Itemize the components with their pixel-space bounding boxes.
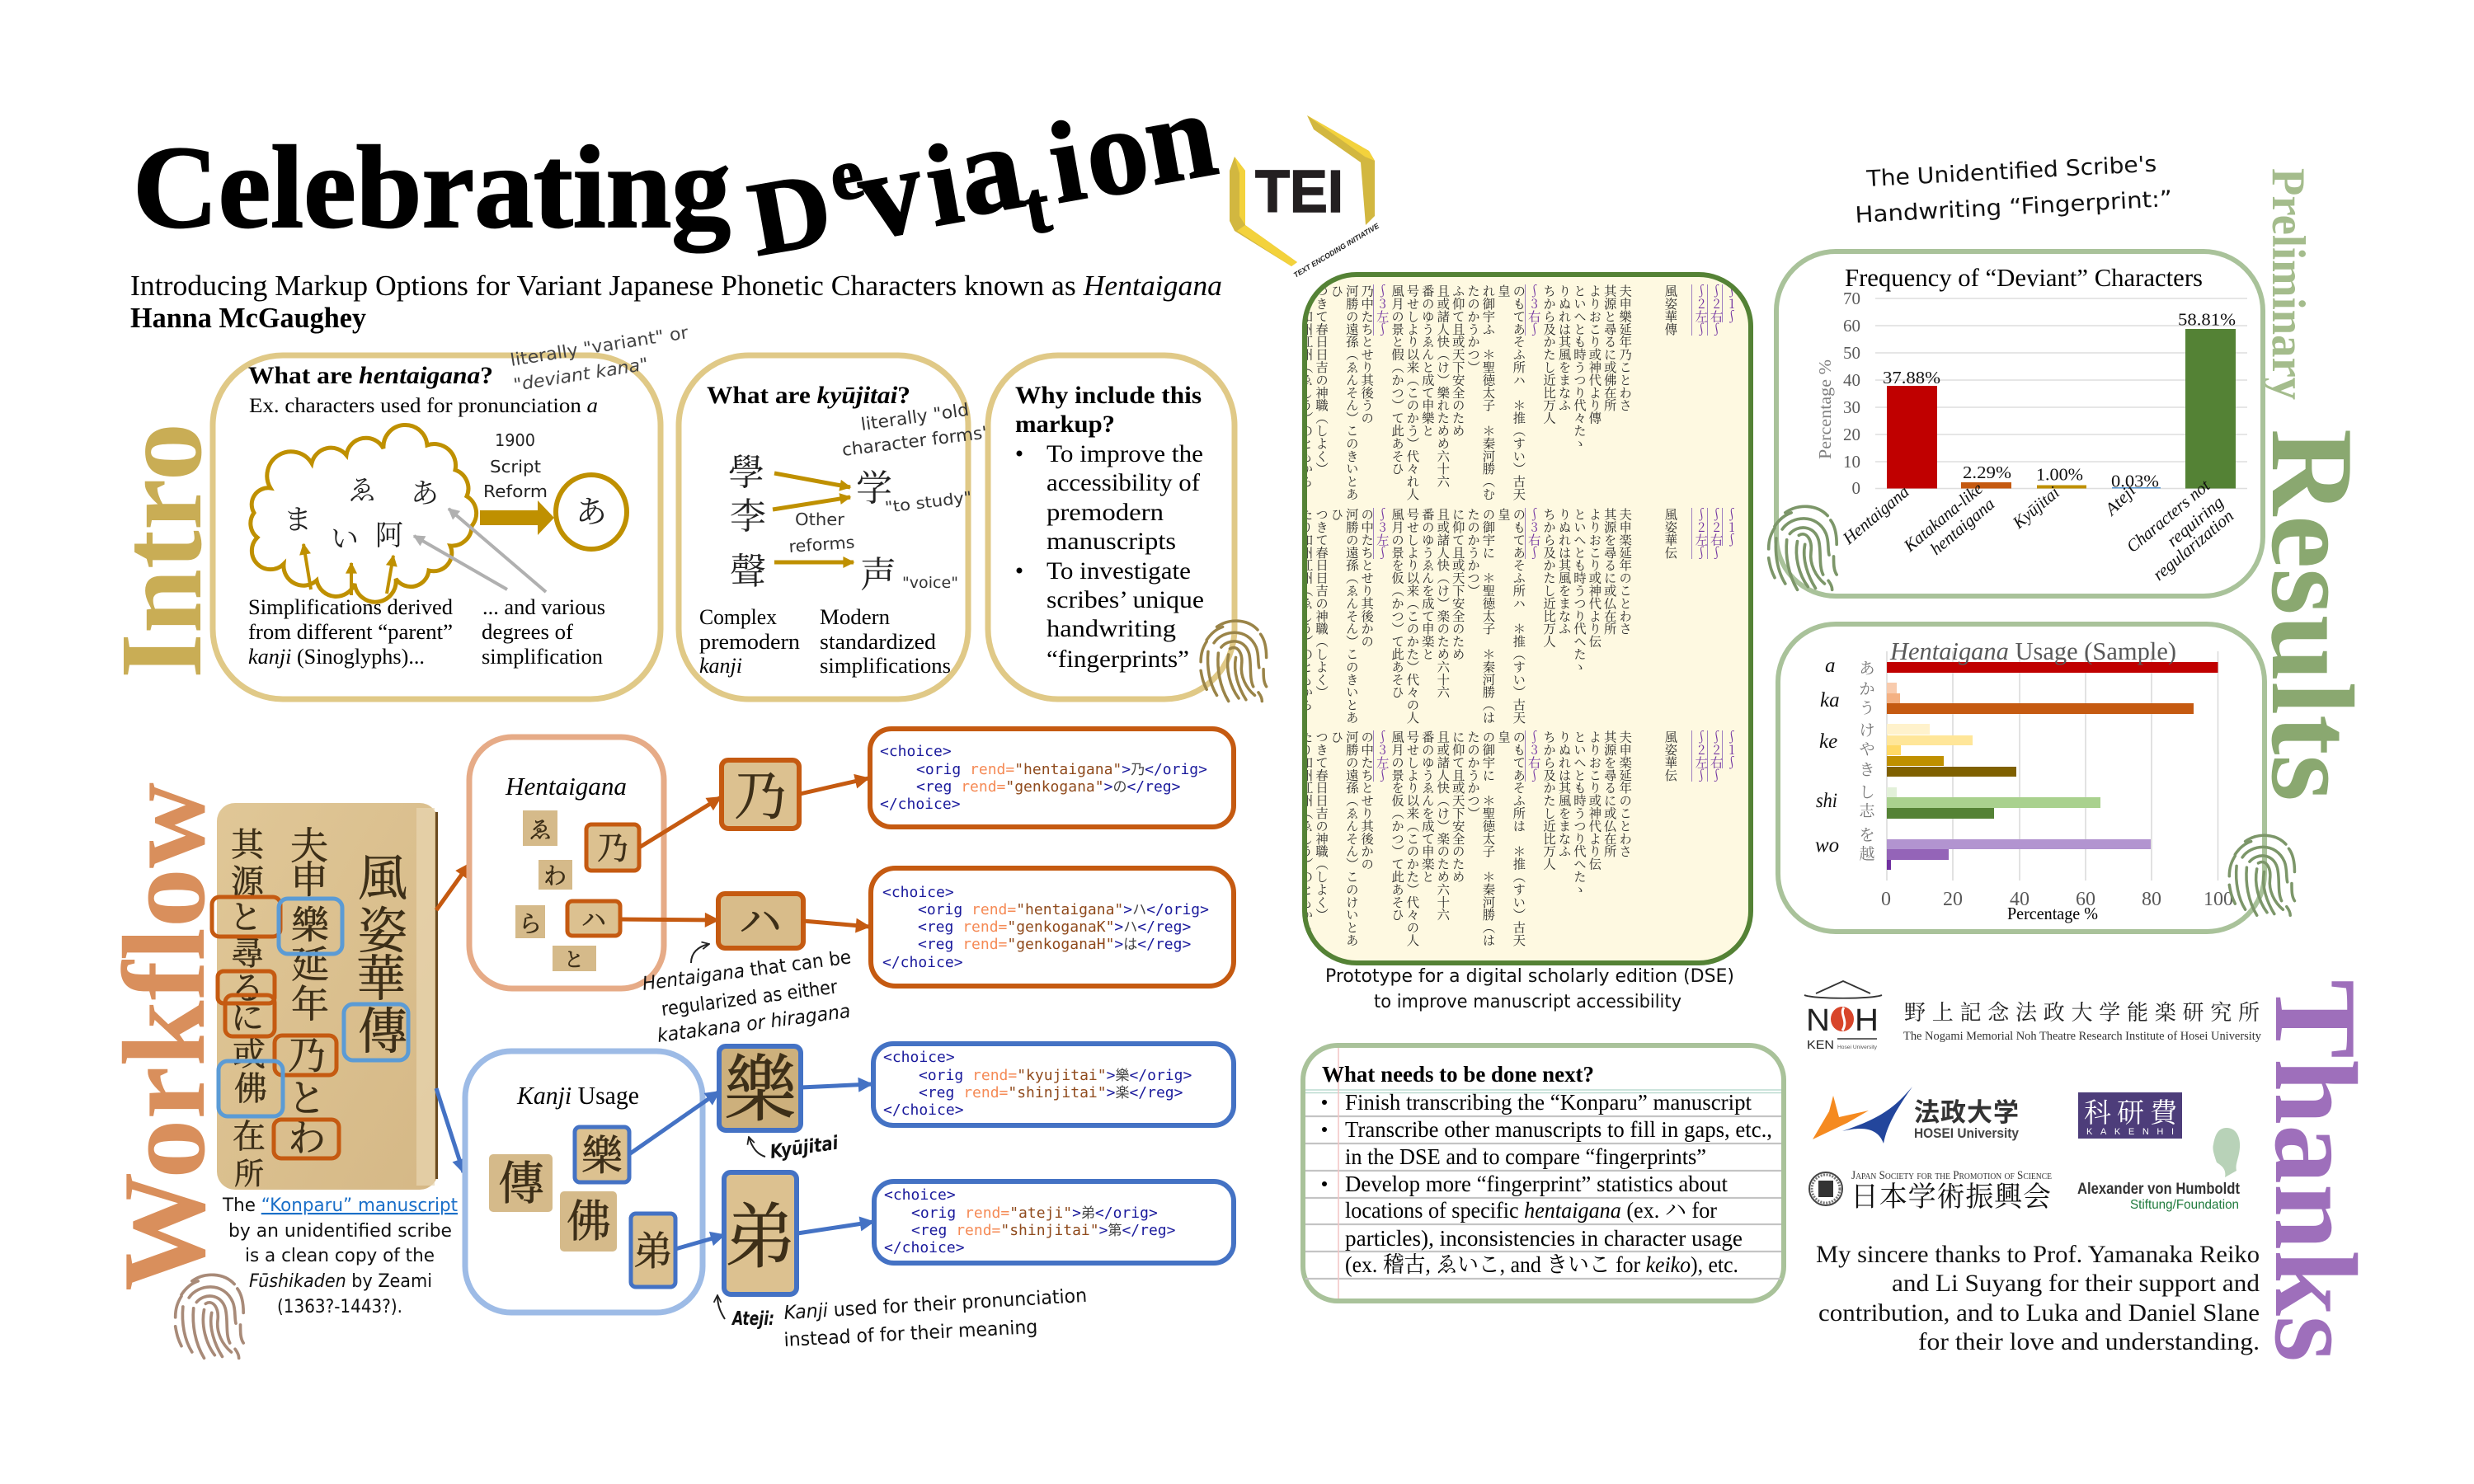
thumbnails: 弟 xyxy=(633,1219,673,1276)
handwritten note: literally "old xyxy=(859,400,970,434)
handwritten heading: fingerprint xyxy=(1855,152,2173,228)
captions: premodern xyxy=(699,630,800,654)
section label: Preliminary: Preliminary xyxy=(2262,168,2314,400)
bar chart: き xyxy=(1859,758,1875,780)
note: ateji: Kanji used for their pronunciation xyxy=(783,1285,1088,1324)
list: in the DSE and to compare “fingerprints” xyxy=(1345,1144,1706,1169)
logo: Nohken: H xyxy=(1855,1003,1879,1038)
handwritten note: character forms" xyxy=(841,422,991,460)
caption left: from different “parent” xyxy=(248,620,453,644)
manuscript image: わ xyxy=(288,1108,326,1162)
bar chart: requiring xyxy=(2163,492,2227,551)
acknowledgements text: My sincere thanks to Prof. Yamanaka Reiko xyxy=(1816,1241,2260,1268)
panel: what are hentaigana xyxy=(213,322,689,699)
manuscript image: 源 xyxy=(231,856,265,903)
code box: kyujitai: <choice> xyxy=(883,1049,955,1066)
caption right: simplification xyxy=(482,645,603,669)
caption right xyxy=(482,595,605,669)
list: locations of specific hentaigana (ex. ハ for xyxy=(1345,1192,1717,1224)
code box: hentaigana ha: <reg rend="genkoganaK">ハ</reg> xyxy=(918,915,1191,936)
DSE caption: Prototype for a digital scholarly edition (DSE) xyxy=(1325,966,1734,987)
sub text: Ex. characters used for pronunciation a xyxy=(249,395,598,417)
bar chart: Kyūjitai xyxy=(2008,482,2063,533)
thumbnails: と xyxy=(564,943,584,972)
bar chart: 80 xyxy=(2142,889,2161,910)
bar chart: 20 xyxy=(1943,889,1963,910)
bar chart: あ xyxy=(1859,656,1875,679)
title: Celebrating xyxy=(133,122,731,253)
manuscript image: 申 xyxy=(290,850,328,904)
bar chart: Hentaigana xyxy=(1838,481,1913,548)
acknowledgements text: and Li Suyang for their support and xyxy=(1892,1270,2260,1297)
manuscript image: 在 xyxy=(233,1111,266,1158)
heading: Kanji Usage xyxy=(516,1081,639,1110)
manuscript image: 延 xyxy=(291,935,329,989)
chart title: Frequency of “Deviant” Characters xyxy=(1845,263,2203,292)
icon: cloud of variant characters: ま xyxy=(284,497,312,538)
heading xyxy=(1015,382,1202,438)
bar chart: regularization xyxy=(2149,505,2237,585)
title word: Deviation: a xyxy=(948,97,1032,242)
list: (ex. 稽古, ゑいこ, and きいこ for keiko), etc. xyxy=(1345,1247,1738,1279)
thumbnails xyxy=(515,810,639,972)
handwritten note: "deviant kana" xyxy=(512,354,650,395)
logo: KAKENHI: KAKENHI xyxy=(2086,1127,2174,1137)
caption: Konparu manuscript: The “Konparu” manuscript xyxy=(222,1195,458,1216)
caption: Konparu manuscript: Fūshikaden by Zeami xyxy=(249,1271,432,1292)
captions: kanji xyxy=(699,654,742,678)
manuscript image: 夫 xyxy=(290,816,328,871)
panel: what needs to be done next xyxy=(1303,1045,1784,1301)
icon: TEI logo: TEI xyxy=(1255,159,1343,225)
manuscript image: と xyxy=(229,891,262,938)
code box: kyujitai: <reg rend="shinjitai">楽</reg> xyxy=(919,1081,1183,1101)
code box: ateji xyxy=(874,1181,1234,1263)
bar chart: 0 xyxy=(1881,889,1891,910)
title word: Deviation: n xyxy=(1134,65,1225,211)
bar chart: Percentage % xyxy=(1815,359,1835,459)
characters: 声 xyxy=(860,545,896,598)
panel: hentaigana xyxy=(469,737,664,989)
DSE caption xyxy=(1325,966,1734,1012)
section label: Workflow: Workflow xyxy=(99,782,229,1291)
characters xyxy=(728,443,896,598)
DSE caption: to improve manuscript accessibility xyxy=(1374,992,1681,1012)
acknowledgements text: contribution, and to Luka and Daniel Slane xyxy=(1818,1299,2260,1327)
panel: digital scholarly edition prototype xyxy=(1302,272,1753,965)
logo: JSPS: Japan Society for the Promotion of Science xyxy=(1851,1169,2052,1182)
manuscript image: 傳 xyxy=(358,993,407,1064)
icon: fingerprint green xyxy=(1769,506,1837,589)
title word: Deviation: D xyxy=(741,150,840,279)
thumbnails: 傳 xyxy=(498,1148,544,1214)
panel: what are kyujitai xyxy=(679,355,991,699)
chart title: Hentaigana Usage (Sample) xyxy=(1889,636,2176,665)
note: hentaigana regularization xyxy=(641,944,853,1047)
institute name xyxy=(1903,996,2261,1043)
logo: Nohken: KEN xyxy=(1807,1038,1834,1052)
bullet list: manuscripts xyxy=(1047,528,1176,555)
captions: simplifications xyxy=(820,654,951,678)
captions: Modern xyxy=(820,605,890,629)
manuscript image: る xyxy=(231,962,264,1009)
bullet list: To improve the xyxy=(1047,440,1203,467)
code box: hentaigana ha: </choice> xyxy=(882,954,963,971)
logo: JSPS: 日本学術振興会 xyxy=(1851,1174,2051,1214)
title word: Deviation: i xyxy=(1039,96,1094,228)
heading: What needs to be done next? xyxy=(1322,1062,1594,1087)
icon: TEI logo: TEXT ENCODING INITIATIVE xyxy=(1292,221,1381,279)
icon: fingerprint brown xyxy=(176,1275,243,1358)
section label: Intro: Intro xyxy=(96,423,226,679)
bar chart: Percentage % xyxy=(2007,904,2098,923)
bar chart: 2.29% xyxy=(1963,463,2011,482)
code box: hentaigana no: <orig rend="hentaigana">乃</orig> xyxy=(916,758,1207,778)
icon: fingerprint green 2 xyxy=(2229,835,2294,915)
panel: kanji usage xyxy=(465,1051,703,1313)
logo: Nohken: Hosei University xyxy=(1837,1045,1877,1050)
title xyxy=(133,65,1225,279)
characters: 聲 xyxy=(730,542,766,594)
arrows xyxy=(773,473,854,562)
note: ateji: Ateji: xyxy=(731,1308,774,1330)
bar chart: 60 xyxy=(2076,889,2095,910)
bar chart: う xyxy=(1859,696,1875,718)
title word: Deviation: e xyxy=(824,133,869,218)
bar chart: 20 xyxy=(1843,425,1860,444)
note: ateji: instead of for their meaning xyxy=(783,1317,1038,1351)
handwritten label: 1900 script reform xyxy=(483,430,548,501)
handwritten note xyxy=(788,400,991,592)
note: kyujitai xyxy=(749,1133,840,1163)
characters: 李 xyxy=(730,486,766,539)
code box: kyujitai: </choice> xyxy=(883,1101,964,1119)
icon: cloud of variant characters: ゑ xyxy=(348,467,376,508)
caption: Konparu manuscript: by an unidentified scribe xyxy=(228,1221,452,1242)
list: Develop more “fingerprint” statistics about xyxy=(1345,1172,1728,1196)
connector arrows xyxy=(620,778,873,1249)
logo: KAKENHI: 科研費 xyxy=(2084,1092,2178,1130)
handwritten label: 1900 script reform: Reform xyxy=(483,481,548,501)
code box: kyujitai: <orig rend="kyujitai">樂</orig> xyxy=(919,1064,1192,1084)
bar chart: Katakana-like xyxy=(1899,478,1987,556)
note: kyujitai: Kyūjitai xyxy=(769,1133,840,1163)
captions: Complex xyxy=(699,605,777,629)
panel: hentaigana usage chart xyxy=(1778,624,2265,932)
handwritten note: "voice" xyxy=(902,574,958,592)
caption right: ... and various xyxy=(482,595,605,619)
characters: 学 xyxy=(856,458,892,511)
thumbnails xyxy=(489,1123,675,1287)
note: hentaigana regularization: katakana or hiragana xyxy=(656,1001,852,1047)
code box: ateji: <choice> xyxy=(884,1186,956,1204)
bar chart: 40 xyxy=(1843,370,1860,390)
bar chart: 0.03% xyxy=(2111,472,2159,491)
heading: markup? xyxy=(1015,411,1115,438)
handwritten label: 1900 script reform: 1900 xyxy=(495,430,535,450)
heading: What are hentaigana? xyxy=(248,362,493,389)
bar chart: 37.88% xyxy=(1883,368,1940,387)
bullet list: premodern xyxy=(1047,499,1164,526)
code box: hentaigana no: <reg rend="genkogana">の</reg> xyxy=(916,775,1181,796)
manuscript image: 風 xyxy=(358,839,407,910)
bar chart: ka xyxy=(1820,689,1840,711)
bar chart: 40 xyxy=(2010,889,2030,910)
icon: cloud of variant characters: あ xyxy=(411,471,439,511)
code box: hentaigana ha xyxy=(871,868,1234,986)
manuscript image: 其 xyxy=(231,819,266,866)
bar chart: a xyxy=(1825,655,1836,677)
bullet list: scribes’ unique xyxy=(1047,586,1204,613)
subtitle: Introducing Markup Options for Variant Japanese Phonetic Characters known as Hentaigana xyxy=(130,270,1222,302)
author: Hanna McGaughey xyxy=(130,302,366,334)
manuscript image: に xyxy=(231,992,264,1039)
caption right: degrees of xyxy=(482,620,573,644)
enlarged character tiles: 弟 xyxy=(725,1180,796,1282)
section label: Thanks: Thanks xyxy=(2251,979,2381,1362)
manuscript image: 年 xyxy=(291,974,329,1029)
icon: reformed kana circle xyxy=(556,475,627,549)
arrow: manuscript to kanji usage xyxy=(436,1088,463,1172)
list: Transcribe other manuscripts to fill in gaps, etc., xyxy=(1345,1117,1772,1142)
manuscript image: 或 xyxy=(233,1028,266,1075)
handwritten note: reforms xyxy=(788,532,855,556)
enlarged character tiles: 乃 xyxy=(734,754,787,830)
arrow: manuscript to hentaigana xyxy=(436,864,469,910)
logo: Hosei University: 法政大学 xyxy=(1914,1092,2019,1129)
manuscript image: 姿 xyxy=(358,892,407,963)
captions xyxy=(699,605,951,678)
manuscript image: 乃 xyxy=(288,1026,326,1080)
icon: cloud of variant characters: 阿 xyxy=(375,513,403,553)
thumbnails: ゑ xyxy=(529,812,552,845)
manuscript image: 所 xyxy=(234,1151,264,1193)
bullet list: “fingerprints” xyxy=(1047,646,1189,673)
text block: regularized transcription: ∫1∫ ∫2右∫ ∫2左∫ 風姿華伝 夫申楽延年のことわさ 其源を尋るに或仏在所 よりおこり或神代より伝 といへとも時うつり代へたゝ りぬれは其風をまなふ ちから及かたし近比万人 ∫3右∫ のもてあそふ所は ＊推（すい）古天 皇 の御宇に ＊聖徳太子 ＊秦河勝（は たのかうかつ） に仰て且或天下安全のため 且或諸人快（け）楽のため六十六 番のゆうゑんを成て申楽と 号せしより以来（このかた）代々の人 風月の景を仮（かつ）て此あそひ ∫3左∫ の中たちとせり其後かの 河勝の遠孫（ゑんそん）このけいとあ ひ つきて春日日吉の神職（しよく） たり和州江州（ゑしう）のともから xyxy=(1302,730,1741,946)
logo: Nohken: N xyxy=(1806,1003,1830,1038)
code box: hentaigana ha: <choice> xyxy=(882,884,954,901)
arrow: script reform xyxy=(480,500,554,535)
handwritten note: Other xyxy=(795,510,845,529)
caption: Konparu manuscript: is a clean copy of the xyxy=(245,1246,435,1266)
thumbnails: わ xyxy=(543,858,567,891)
thumbnails: 乃 xyxy=(597,823,628,868)
bar chart: を xyxy=(1859,823,1875,845)
institute name: 野上記念法政大学能楽研究所 xyxy=(1904,996,2260,1026)
handwritten note: "to study" xyxy=(884,488,973,517)
bar chart: 越 xyxy=(1859,842,1875,864)
bar chart: 志 xyxy=(1859,799,1875,821)
logo: Humboldt Foundation: Stiftung/Foundation xyxy=(2130,1198,2239,1212)
icon: fingerprint gold xyxy=(1201,621,1267,701)
code box: ateji: <reg rend="shinjitai">第</reg> xyxy=(911,1219,1176,1239)
handwritten note: literally "variant" or xyxy=(509,322,689,370)
title word: Deviation: i xyxy=(916,120,971,251)
caption: Konparu manuscript xyxy=(222,1195,458,1317)
code box: hentaigana no: </choice> xyxy=(880,796,961,813)
text block: original transcription: ∫1∫ ∫2右∫ ∫2左∫ 風姿華傳 夫申樂延年乃ことわさ 其源と尋るに或佛在所 よりおこり或神代より傳 といへとも時うつり代々たゝ りぬれは其風をまなふ ちから及かたし近比万人 ∫3右∫ のもてあそふ所ハ ＊推（すい）古天 皇 れ御宇ふ ＊聖徳太子 ＊秦河勝（む たのかうかつ） ふ仰て且或天下安全のため 且或諸人快（け）樂れためめ六十六 番のゆうゑんと成て申樂と 号せしより以来（このかう）代々れ人 風月の景と假（かつ）て此あそひ ∫3左∫ 乃中たちとせり其後うの 河勝の遠孫（ゑんそん）このきいとあ ひ つきて春日日吉の神職（しよく） たり和州江州（ゑしう）のともから xyxy=(1302,284,1741,500)
code box: ateji: </choice> xyxy=(884,1239,965,1256)
list xyxy=(1322,1090,1772,1279)
manuscript image xyxy=(212,803,438,1193)
manuscript image: 樂 xyxy=(291,895,330,950)
caption left xyxy=(248,595,453,669)
bar chart: ke xyxy=(1819,730,1837,753)
list: particles), inconsistencies in character usage xyxy=(1345,1226,1743,1251)
handwritten heading: fingerprint: Handwriting “Fingerprint:” xyxy=(1855,186,2173,228)
bar chart: wo xyxy=(1815,834,1839,857)
list: Finish transcribing the “Konparu” manuscript xyxy=(1345,1090,1752,1115)
handwritten label: 1900 script reform: Script xyxy=(490,457,541,477)
thumbnails: ハ xyxy=(581,899,606,936)
bar chart xyxy=(1815,651,2233,923)
code box: hentaigana ha: <orig rend="hentaigana">ハ</orig> xyxy=(918,898,1209,918)
bar chart: 58.81% xyxy=(2178,310,2236,330)
panel: why include this markup xyxy=(988,355,1235,699)
bar chart xyxy=(1815,289,2247,585)
title word: Deviation xyxy=(741,65,1225,279)
bar chart: か xyxy=(1859,677,1875,699)
handwritten note xyxy=(509,322,689,395)
caption: Konparu manuscript: (1363?-1443?). xyxy=(277,1297,402,1317)
title word: Deviation: o xyxy=(1074,79,1159,224)
institute name: The Nogami Memorial Noh Theatre Research Institute of Hosei University xyxy=(1903,1030,2261,1043)
bar chart: 60 xyxy=(1843,316,1860,336)
title word: Deviation: t xyxy=(1018,166,1056,251)
logo: Humboldt Foundation xyxy=(2077,1128,2241,1212)
bullet list: accessibility of xyxy=(1047,469,1200,496)
enlarged character tiles: ハ xyxy=(739,887,782,949)
text block: modernized transcription: ∫1∫ ∫2右∫ ∫2左∫ 風姿華伝 夫申楽延年のことわさ 其源を尋るに或仏在所 よりおこり或神代より伝 といへとも時うつり代へたゝ りぬれは其風をまなふ ちから及かたし近比万人 ∫3右∫ のもてあそふ所ハ ＊推（すい）古天 皇 の御宇に ＊聖徳太子 ＊秦河勝（は たのかうかつ） に仰て且或天下安全のため 且或諸人快（け）楽のため六十六 番のゆうゑんを成て申楽と 号せしより以来（このかた）代々の人 風月の景を仮（かつ）て此あそひ ∫3左∫ の中たちとせり其後かの 河勝の遠孫（ゑんそん）このきいとあ ひ つきて春日日吉の神職（しよく） たり和州江州（ゑしう）のともから xyxy=(1302,508,1741,724)
note: hentaigana regularization: regularized as either xyxy=(660,976,839,1021)
bullet list: To investigate xyxy=(1047,557,1191,585)
panel: frequency chart xyxy=(1776,251,2263,596)
caption left: Simplifications derived xyxy=(248,595,453,619)
note: hentaigana regularization: Hentaigana that can be xyxy=(641,946,853,995)
characters: 學 xyxy=(728,443,764,495)
captions: standardized xyxy=(820,630,936,654)
enlarged character tiles xyxy=(718,754,803,1294)
code box: hentaigana ha: <reg rend="genkoganaH">は</reg> xyxy=(918,932,1191,953)
thumbnails: 樂 xyxy=(581,1123,623,1182)
bar chart: し xyxy=(1859,780,1875,802)
bar chart: 0 xyxy=(1852,478,1860,498)
bar chart: 100 xyxy=(2204,889,2233,910)
logo: Nohken xyxy=(1804,981,1882,1052)
code box: hentaigana no: <choice> xyxy=(880,743,952,760)
bar chart: 70 xyxy=(1843,289,1860,308)
thumbnails: ら xyxy=(519,906,542,939)
manuscript image: と xyxy=(288,1068,326,1123)
icon: cloud of variant characters: い xyxy=(331,516,359,556)
bullet list xyxy=(1016,440,1204,673)
bar chart: 10 xyxy=(1843,452,1860,472)
bar chart: 1.00% xyxy=(2036,465,2083,485)
heading: Hentaigana xyxy=(505,772,627,801)
thumbnails: 佛 xyxy=(567,1186,611,1250)
logo: Humboldt Foundation: Alexander von Humboldt xyxy=(2077,1181,2241,1198)
bar chart: け xyxy=(1859,718,1875,740)
bar chart: 30 xyxy=(1843,397,1860,417)
bar chart: 50 xyxy=(1843,343,1860,363)
icon: TEI logo xyxy=(1230,115,1381,279)
logo: Hosei University xyxy=(1813,1087,2019,1144)
caption left: kanji (Sinoglyphs)... xyxy=(248,645,425,669)
icon: reformed kana circle: あ xyxy=(576,486,607,532)
code box: hentaigana no xyxy=(870,729,1234,827)
manuscript image: 華 xyxy=(356,940,406,1011)
heading: What are kyūjitai? xyxy=(707,382,910,409)
bar chart: hentaigana xyxy=(1926,494,1998,559)
heading: Why include this xyxy=(1015,382,1202,409)
bar chart: Ateji xyxy=(2100,481,2139,520)
acknowledgements text: for their love and understanding. xyxy=(1918,1328,2260,1355)
enlarged character tiles: 樂 xyxy=(724,1032,797,1136)
bar chart: shi xyxy=(1816,790,1837,812)
bullet list: handwriting xyxy=(1047,615,1176,642)
logo: Hosei University: HOSEI University xyxy=(1914,1125,2019,1141)
highlight boxes xyxy=(212,897,408,1158)
title word: Deviation: v xyxy=(849,120,934,265)
bar chart: や xyxy=(1859,737,1875,759)
code box: kyujitai xyxy=(873,1044,1234,1125)
code box: ateji: <orig rend="ateji">弟</orig> xyxy=(911,1201,1158,1222)
handwritten heading: fingerprint: The Unidentified Scribe's xyxy=(1865,152,2157,192)
note: ateji xyxy=(717,1285,1088,1351)
manuscript image: 佛 xyxy=(234,1063,267,1110)
acknowledgements text xyxy=(1816,1241,2260,1355)
manuscript image: 尋 xyxy=(231,928,264,974)
icon: cloud of variant characters xyxy=(251,425,546,602)
section label: Results: Results xyxy=(2247,429,2378,801)
bar chart: Characters not xyxy=(2123,475,2214,556)
